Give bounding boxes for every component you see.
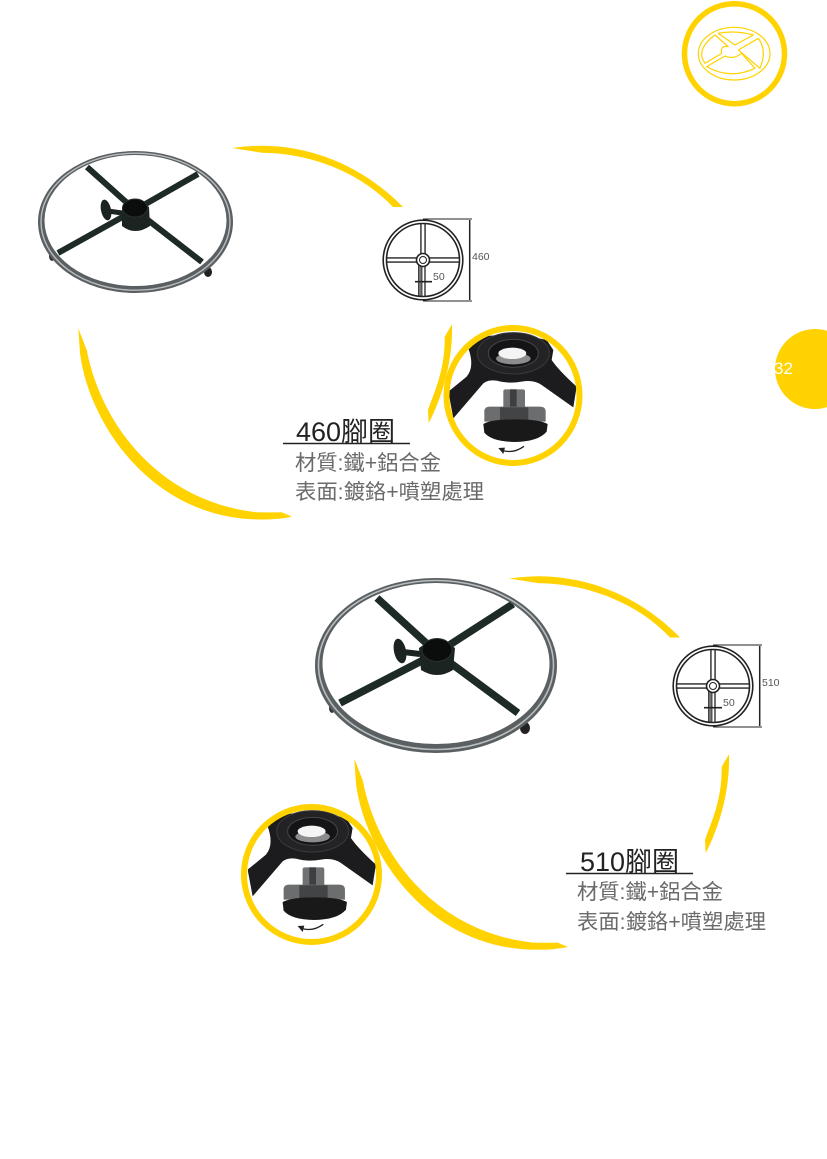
finish line: 表面:鍍鉻+噴塑處理 (577, 911, 766, 934)
dimension drawing: 460: 460 (472, 251, 490, 263)
arc: bottom left of 460 ring (78, 328, 292, 520)
detail circle: 510 height knob (244, 807, 379, 942)
dimension drawing: 510: 510 (762, 677, 780, 689)
dimension drawing: 510: 50 (723, 697, 735, 709)
material line: 材質:鐵+鋁合金 (577, 881, 723, 904)
arc: bottom left of 510 ring (354, 759, 568, 950)
arc: top right of 460 ring (232, 146, 403, 207)
dimension drawing: 460 (380, 219, 490, 301)
heading: 460 footring: 460腳圈 (296, 417, 395, 447)
page number tab (774, 329, 827, 409)
product photo: 460 footring (38, 151, 233, 293)
page number tab: 32 (774, 359, 793, 378)
arc: beside 460 detail circle (428, 324, 452, 423)
arc: top right of 510 ring (509, 576, 680, 638)
arc: right of 510 ring (705, 754, 729, 853)
detail circle: 460 height knob (446, 328, 580, 463)
text block: 510 footring (566, 847, 766, 934)
finish line: 表面:鍍鉻+噴塑處理 (295, 481, 484, 504)
product photo: 510 footring (315, 578, 557, 753)
dimension drawing: 460: 50 (433, 271, 445, 283)
text block: 460 footring (283, 417, 484, 504)
dimension drawing: 510 (670, 645, 780, 727)
icon: yellow footring badge (684, 4, 784, 104)
material line: 材質:鐵+鋁合金 (295, 452, 441, 475)
heading: 510 footring: 510腳圈 (580, 847, 679, 877)
